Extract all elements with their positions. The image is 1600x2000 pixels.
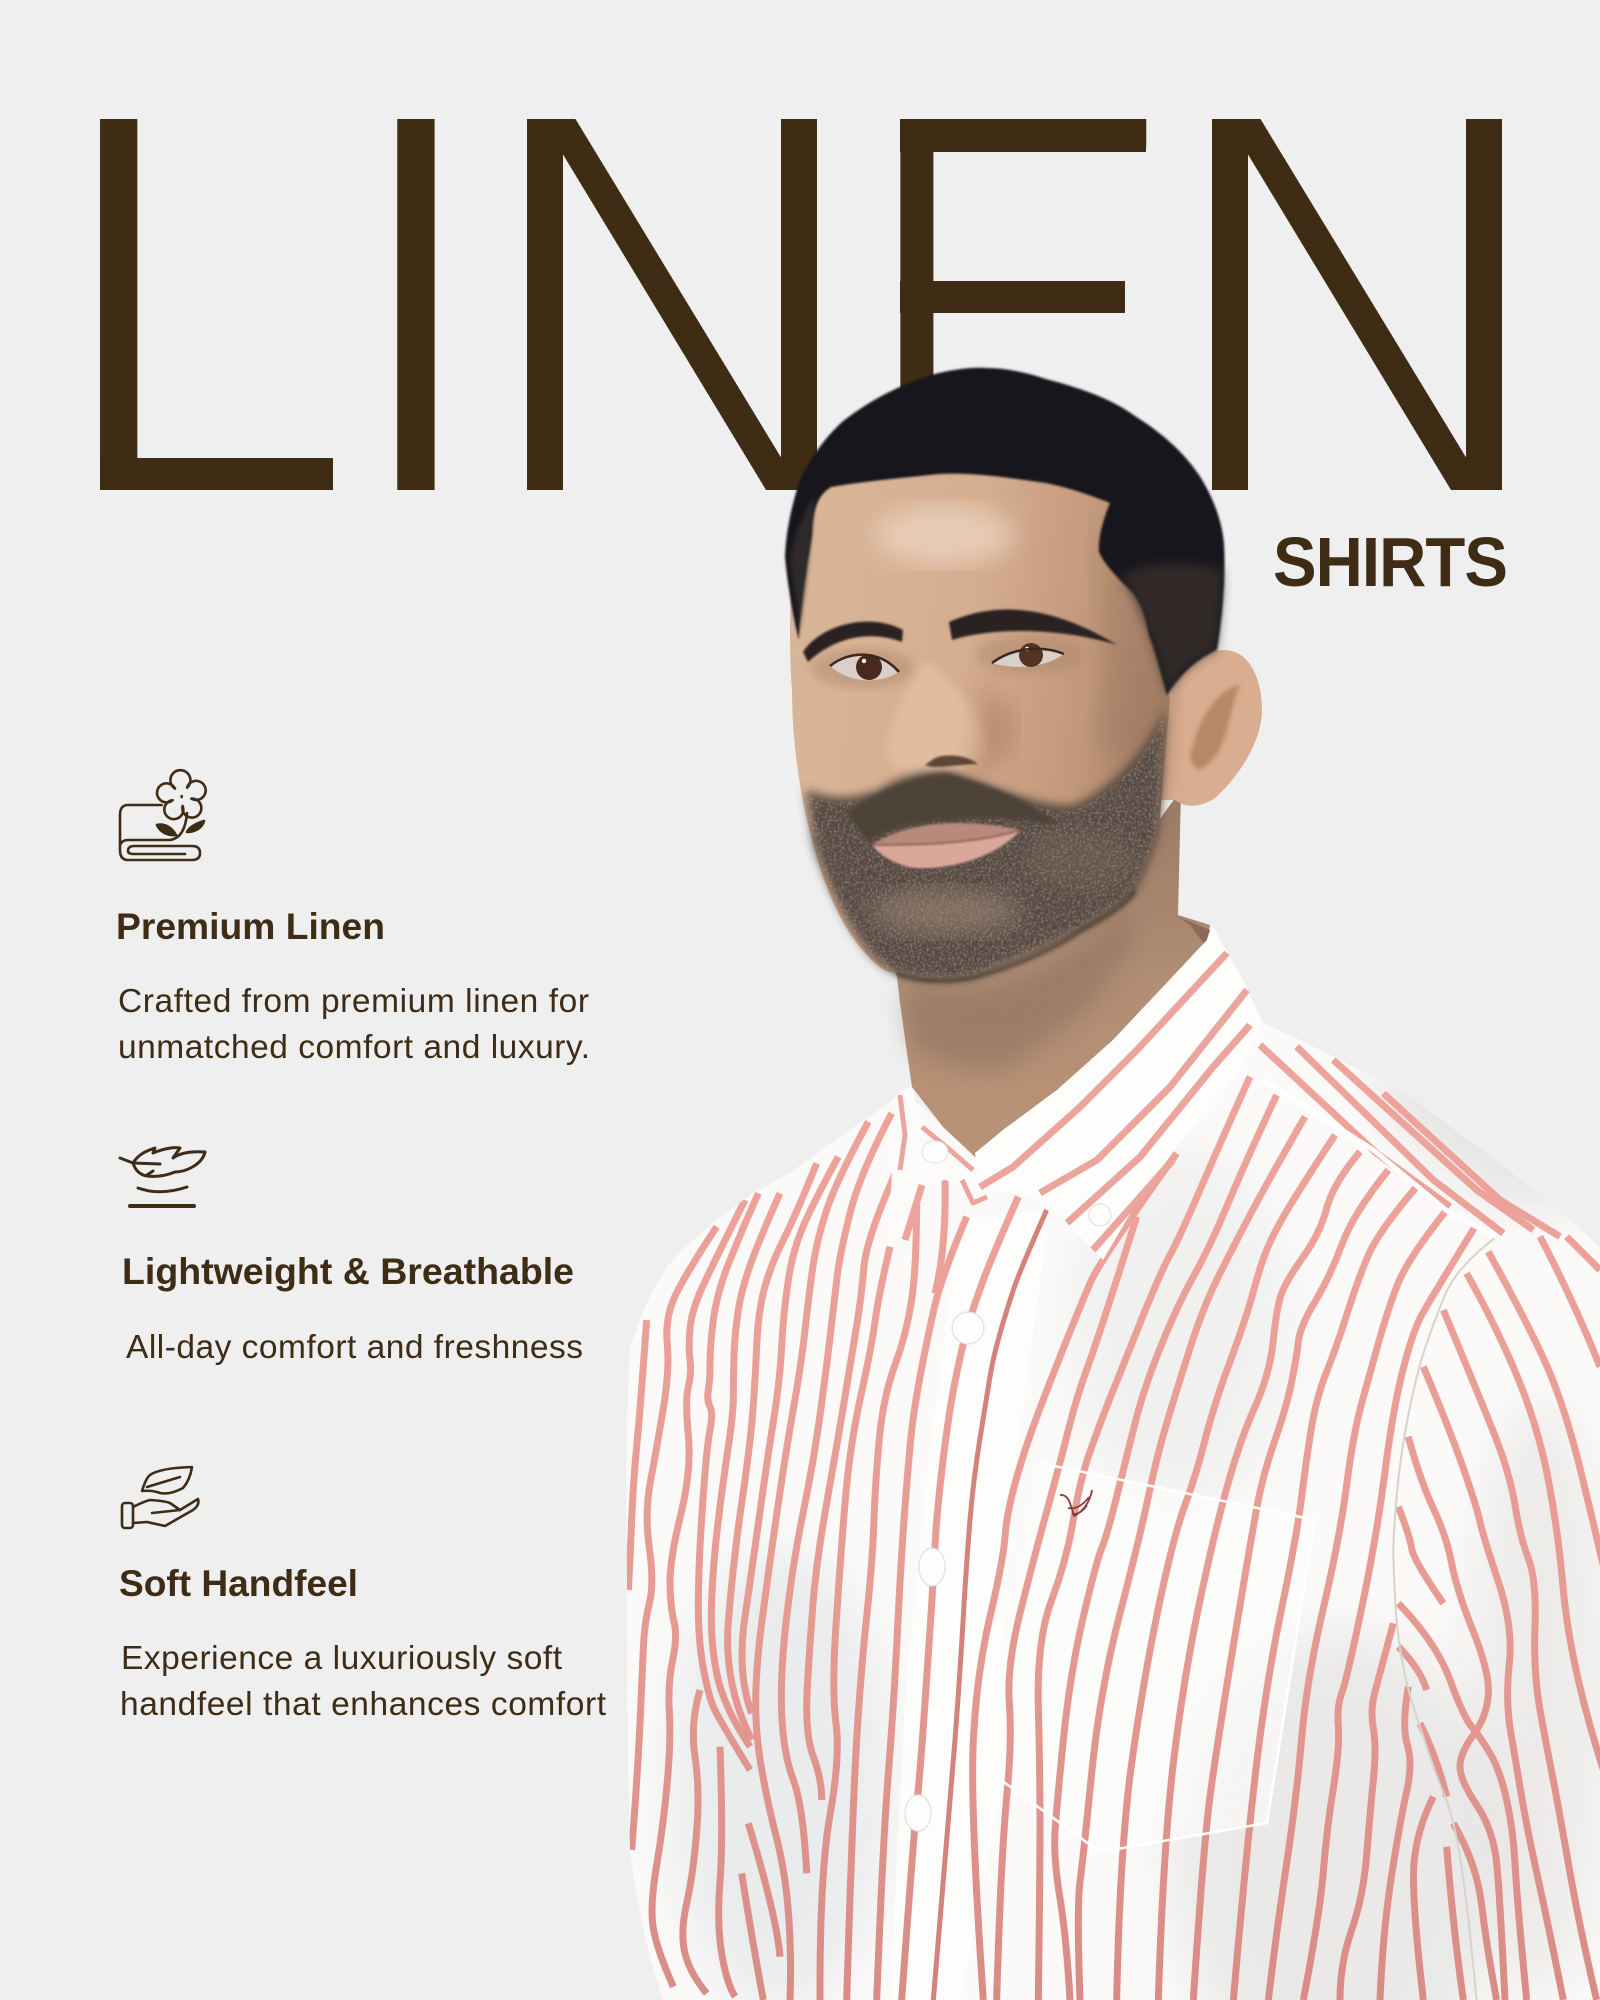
title: LINEN: E: [853, 0, 1184, 617]
title: LINEN: L: [46, 0, 359, 616]
logo on pocket: [1060, 1490, 1092, 1516]
lips: [872, 823, 1021, 868]
neck stubble shadow: [905, 905, 1140, 1070]
title: LINEN: N: [477, 0, 867, 617]
pocket edge: [983, 1463, 1315, 1852]
nose shading: [887, 660, 985, 774]
subtitle: SHIRTS: SHIRTS: [1273, 523, 1507, 601]
shirt: [626, 927, 1600, 2000]
eyes: [830, 643, 1064, 680]
head: [790, 421, 1175, 980]
mustache: [846, 774, 1058, 842]
stripes left torso: [877, 1217, 967, 2000]
body text: unmatched comfort and luxury.: [118, 1029, 590, 1066]
stripes right sleeve: [1567, 1237, 1600, 1270]
stripes right chest: [1303, 1227, 1475, 2000]
body text: Experience a luxuriously soft: [121, 1640, 563, 1677]
buttons: [905, 1312, 984, 1831]
feature: lightweight and breathable: [120, 1148, 583, 1366]
yoke seam: [1346, 1130, 1496, 1239]
body text: [120, 1640, 607, 1723]
title: LINEN: [46, 0, 1552, 617]
heading: Lightweight & Breathable: [122, 1251, 574, 1292]
eye sockets: [810, 648, 914, 688]
model photo: man in striped linen shirt: [626, 368, 1600, 2000]
stripes chest under arm: [1340, 1623, 1393, 2000]
hair: [785, 368, 1225, 695]
right collar: [975, 927, 1263, 1260]
neck: [880, 790, 1210, 1157]
forehead highlight: [875, 505, 1015, 565]
feature: premium linen: [116, 770, 590, 1066]
placket: [890, 1210, 1050, 2000]
icon: feather: [120, 1148, 205, 1206]
placket stripes: [933, 1210, 1047, 2000]
face skin: [790, 421, 1170, 980]
icon: towel with flower: [120, 770, 206, 860]
eyebrows: [803, 610, 1117, 662]
body text: [118, 983, 590, 1066]
heading: Premium Linen: [116, 906, 385, 947]
sleeve seam: [1393, 1237, 1497, 2000]
title: LINEN: I: [338, 0, 494, 616]
icon: hand with leaf: [122, 1467, 198, 1528]
temple shadow: [1095, 510, 1175, 800]
body text: Crafted from premium linen for: [118, 983, 589, 1020]
heading: Soft Handfeel: [119, 1563, 358, 1604]
pocket: [1180, 1650, 1293, 1836]
left collar: [888, 1087, 975, 1243]
title: LINEN: N: [1162, 0, 1552, 617]
body text: All-day comfort and freshness: [126, 1329, 583, 1366]
feature: soft handfeel: [119, 1467, 607, 1723]
stripes yoke: [1260, 1045, 1450, 1207]
shirt shading: [670, 1020, 1600, 2000]
body text: handfeel that enhances comfort: [120, 1686, 607, 1723]
beard: [806, 705, 1166, 980]
ear: [1145, 650, 1262, 806]
collar: [888, 927, 1263, 1260]
